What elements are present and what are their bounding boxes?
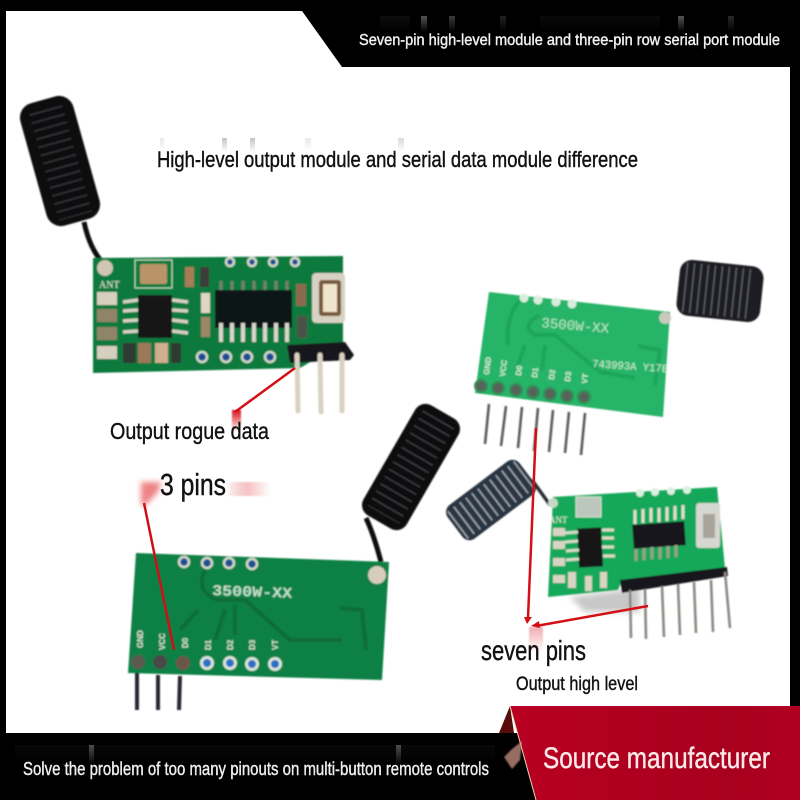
- heading: module difference: High-level output module and serial data module difference: [157, 147, 638, 172]
- pin labels: D2: [226, 639, 235, 650]
- part number: 743993A Y17B: [592, 359, 669, 376]
- upper holes: [520, 294, 576, 308]
- module: back side of seven-pin PCB: [475, 259, 765, 455]
- three pins: [137, 673, 180, 710]
- pin labels: D1: [204, 639, 213, 650]
- pin labels: GND: [482, 356, 493, 375]
- pin labels: D0: [181, 637, 190, 648]
- push button: [696, 503, 720, 548]
- board shadow: [570, 588, 640, 612]
- top banner text: [359, 16, 780, 49]
- red arrows: seven pins: [524, 428, 648, 653]
- pin labels: VT: [271, 640, 280, 650]
- pin labels: VCC: [158, 633, 167, 650]
- pin labels: GND: [136, 630, 145, 648]
- source manufacturer banner: [510, 706, 800, 800]
- dark red fold of source banner: [499, 706, 514, 733]
- label: 3 pins: 3 pins: [160, 467, 226, 502]
- bottom banner text: Solve the problem of too many pinouts on multi-button remote controls: [23, 759, 489, 779]
- pin labels: [136, 630, 280, 650]
- pin labels: [482, 356, 590, 384]
- ANT silk label: ANT: [549, 515, 568, 525]
- label: output rogue data: Output rogue data: [110, 418, 269, 444]
- module: three-pin high-level PCB with antenna: [16, 92, 354, 412]
- seven-pin header: [620, 567, 730, 639]
- silk label: 3500W-XX: [212, 583, 292, 603]
- label: output high level: Output high level: [516, 674, 638, 695]
- traces: [508, 298, 660, 385]
- through holes top: [179, 557, 257, 569]
- traces: [180, 570, 366, 650]
- antenna pad: [97, 260, 113, 276]
- heading: module difference: [157, 138, 638, 172]
- pin labels: VT: [580, 373, 590, 384]
- pin labels: D2: [547, 368, 557, 380]
- through holes: [197, 258, 299, 362]
- circuit board: [548, 487, 725, 597]
- crystal: [576, 497, 601, 517]
- small chip: [123, 295, 188, 338]
- pin labels: D0: [514, 364, 524, 376]
- pin labels: VCC: [498, 359, 509, 377]
- antenna coil: [16, 92, 104, 264]
- antenna pad: [548, 498, 558, 508]
- antenna coil: [442, 456, 550, 544]
- antenna pad: [659, 312, 671, 324]
- module: back side of three-pin PCB: [128, 400, 464, 710]
- through holes bottom: [131, 655, 280, 670]
- small chip: [565, 527, 615, 568]
- red arrow: output rogue data: [232, 368, 295, 432]
- main chip: [215, 281, 292, 342]
- pin labels: D3: [563, 370, 573, 382]
- ANT silk label: ANT: [99, 280, 120, 291]
- main chip: [632, 505, 686, 561]
- pin labels: D1: [530, 366, 540, 378]
- upper holes: [636, 486, 691, 497]
- circuit board: [93, 256, 343, 373]
- seven pins: [485, 404, 585, 455]
- circuit board: [475, 292, 670, 417]
- pin labels: D3: [248, 639, 257, 650]
- silk text: 3500W-XX: [541, 316, 610, 338]
- red arrow: three pins: [141, 482, 271, 650]
- label: seven pins: seven pins: [481, 635, 586, 666]
- push button: [312, 273, 345, 323]
- three-pin header: [287, 342, 354, 412]
- bottom banner text: [15, 745, 495, 779]
- SMD parts: [553, 528, 607, 591]
- antenna coil: [358, 400, 464, 562]
- antenna pad: [368, 566, 386, 584]
- solder pads: [475, 380, 590, 403]
- glow streak at banner edge: [504, 741, 522, 769]
- SMD parts: [97, 267, 307, 363]
- circuit board: [128, 553, 389, 680]
- crystal: [135, 260, 172, 288]
- antenna coil: [675, 259, 765, 323]
- module: seven-pin high-level PCB: [442, 456, 730, 639]
